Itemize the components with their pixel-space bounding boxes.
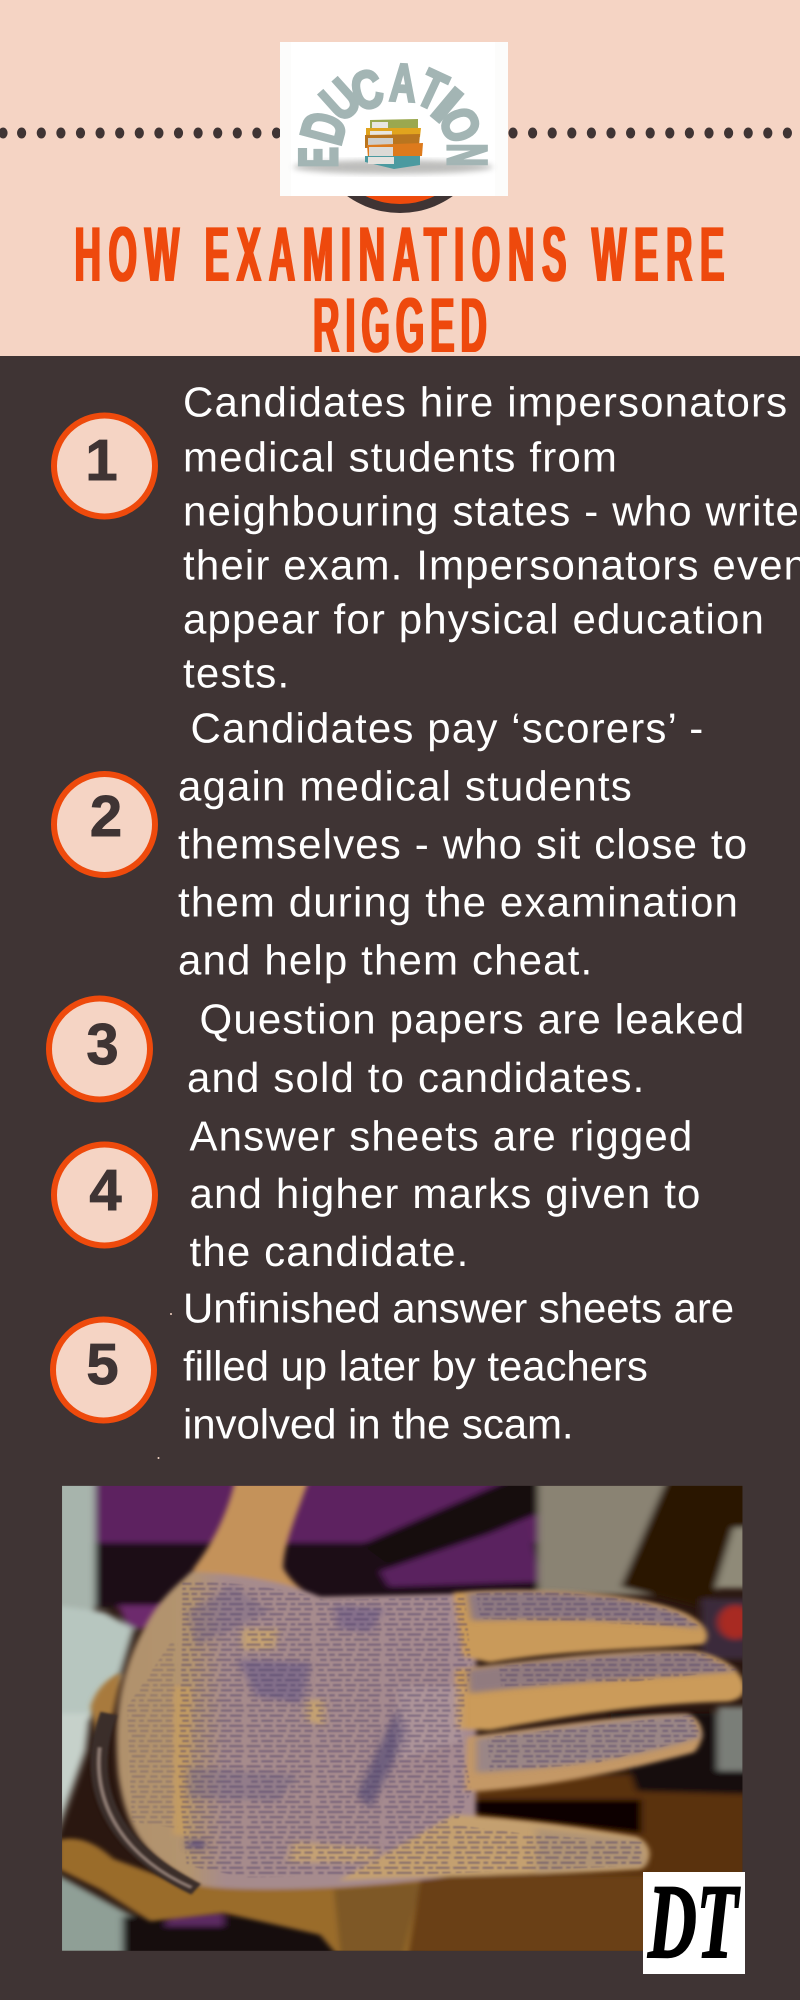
bangle on wrist (99, 1713, 196, 1889)
step 2 (54, 704, 761, 984)
logo: DT newspaper mark (643, 1863, 745, 1980)
icon: education logo with books: D (289, 106, 360, 151)
icon: number badge 5 (53, 1320, 154, 1420)
icon: number badge 3: 3 (86, 1012, 119, 1077)
mauve ink wash (187, 1585, 738, 1872)
text block: step 2: again medical students (178, 762, 633, 810)
step 5 (53, 1284, 746, 1459)
text block: step 1: Candidates hire impersonators (183, 378, 788, 426)
step 4 (54, 1112, 714, 1275)
text block: step 1: neighbouring states - who write (183, 488, 800, 534)
icon: education logo with books (280, 42, 508, 196)
icon: stack of books (365, 119, 423, 169)
text block: step 5: Unfinished answer sheets are (183, 1284, 734, 1332)
fingers (453, 1590, 707, 1663)
text block: step 5: involved in the scam. (183, 1400, 574, 1448)
text block: step 4: and higher marks given to (190, 1170, 702, 1217)
text block: step 4: the candidate. (190, 1228, 469, 1275)
tan strip on palm edge (173, 1686, 192, 1835)
icon: number badge 1 (54, 416, 155, 516)
text block: step 2: themselves - who sit close to (178, 820, 748, 868)
text block: step 1: their exam. Impersonators even (183, 542, 800, 588)
photo: palm of a hand covered in handwritten notes (54, 1480, 756, 1957)
icon: education logo with books: C (345, 58, 389, 123)
text block: step 1: tests. (183, 650, 290, 696)
step 3 (49, 996, 758, 1101)
icon: number badge 1: 1 (85, 428, 118, 493)
text block: step 3: and sold to candidates. (187, 1054, 645, 1101)
text block: step 2: Candidates pay ‘scorers’ - (190, 704, 704, 752)
text block: step 1: medical students from (183, 434, 618, 480)
lower arm (58, 1839, 430, 1957)
text block: step 1: appear for physical education (183, 596, 765, 642)
icon: number badge 4: 4 (89, 1158, 122, 1223)
icon: education logo with books: N (436, 144, 497, 166)
icon: education logo with books: U (310, 68, 372, 133)
handwriting texture (127, 1582, 740, 1877)
dotted divider right (508, 128, 792, 138)
text block: step 3: Question papers are leaked (200, 996, 745, 1042)
icon: number badge 2 (54, 774, 155, 875)
icon: dark and orange circle behind logo (347, 196, 453, 213)
text block: step 2: them during the examination (178, 878, 739, 926)
step 1 (54, 378, 800, 696)
logo: DT newspaper mark: DT (647, 1863, 741, 1980)
dotted divider left (0, 128, 281, 138)
text block: step 4: Answer sheets are rigged (190, 1112, 693, 1160)
icon: education logo with books: A (388, 53, 418, 114)
palm (116, 1571, 476, 1889)
wrist strap (91, 1673, 122, 1737)
icon: number badge 3 (49, 998, 150, 1100)
icon: number badge 5: 5 (86, 1332, 119, 1397)
title: RIGGED (313, 281, 487, 369)
icon: education logo with books: I (421, 77, 472, 134)
title (74, 210, 725, 369)
title: HOW EXAMINATIONS WERE (74, 210, 725, 298)
top finger (178, 1480, 320, 1612)
icon: education logo with books: O (428, 100, 492, 151)
text block: step 2: and help them cheat. (178, 936, 593, 984)
icon: number badge 2: 2 (90, 784, 122, 849)
panel: peach header background (0, 0, 800, 356)
text block: step 5: filled up later by teachers (183, 1342, 648, 1390)
icon: number badge 4 (54, 1144, 155, 1246)
icon: education logo with books: T (408, 59, 455, 122)
icon: education logo with books: E (289, 147, 350, 168)
